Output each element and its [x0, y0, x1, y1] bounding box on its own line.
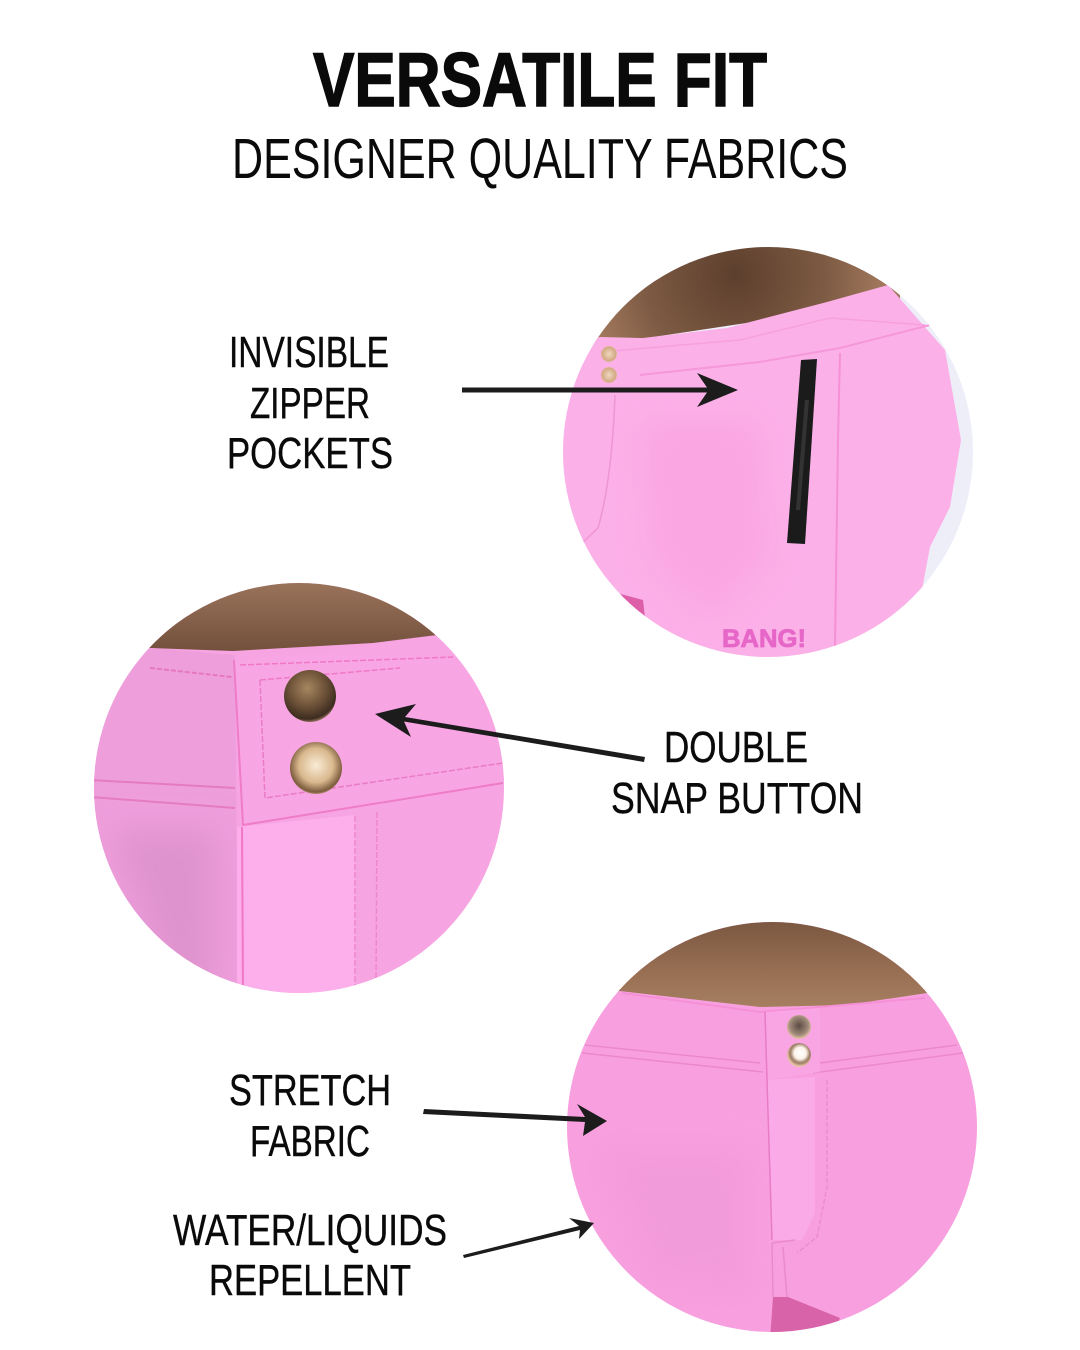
shaded left panel [90, 648, 238, 1000]
snap buttons [601, 346, 617, 362]
label: invisible zipper pockets: INVISIBLE [229, 328, 389, 377]
photo circle: double snap button [90, 580, 510, 1000]
arrow: zipper pockets [462, 373, 738, 407]
waistband and fly flap [432, 635, 504, 783]
snap buttons [787, 1015, 811, 1039]
skin [149, 583, 436, 651]
label: stretch fabric: FABRIC [250, 1117, 370, 1166]
zipper [787, 359, 817, 544]
arrow: snap button [375, 704, 645, 762]
label: stretch fabric: STRETCH [229, 1066, 391, 1115]
skin [593, 247, 900, 345]
logo: BANG! [722, 625, 806, 653]
label: invisible zipper pockets: ZIPPER [250, 379, 370, 428]
title: VERSATILE FIT [313, 38, 767, 123]
label: invisible zipper pockets [227, 328, 393, 478]
photo circle: stretch fabric [565, 920, 985, 1340]
snap buttons [284, 670, 336, 722]
label: double snap button: DOUBLE [664, 723, 808, 772]
pink shorts [560, 285, 961, 665]
label: invisible zipper pockets: POCKETS [227, 429, 393, 478]
photo circle: invisible zipper pocket [560, 245, 980, 665]
skin [618, 922, 927, 1007]
label: double snap button: SNAP BUTTON [611, 774, 863, 823]
label: water/liquids repellent: WATER/LIQUIDS [173, 1206, 447, 1255]
fly panel [237, 815, 355, 1000]
arrow: stretch fabric [423, 1104, 607, 1136]
subtitle: DESIGNER QUALITY FABRICS [232, 127, 848, 191]
label: stretch fabric [229, 1066, 391, 1166]
fabric shading [600, 1150, 750, 1290]
arrow: water repellent [463, 1218, 594, 1258]
label: double snap button [611, 723, 863, 823]
label: water/liquids repellent: REPELLENT [209, 1256, 411, 1305]
label: water/liquids repellent [173, 1206, 447, 1305]
shading on shorts [656, 434, 758, 595]
